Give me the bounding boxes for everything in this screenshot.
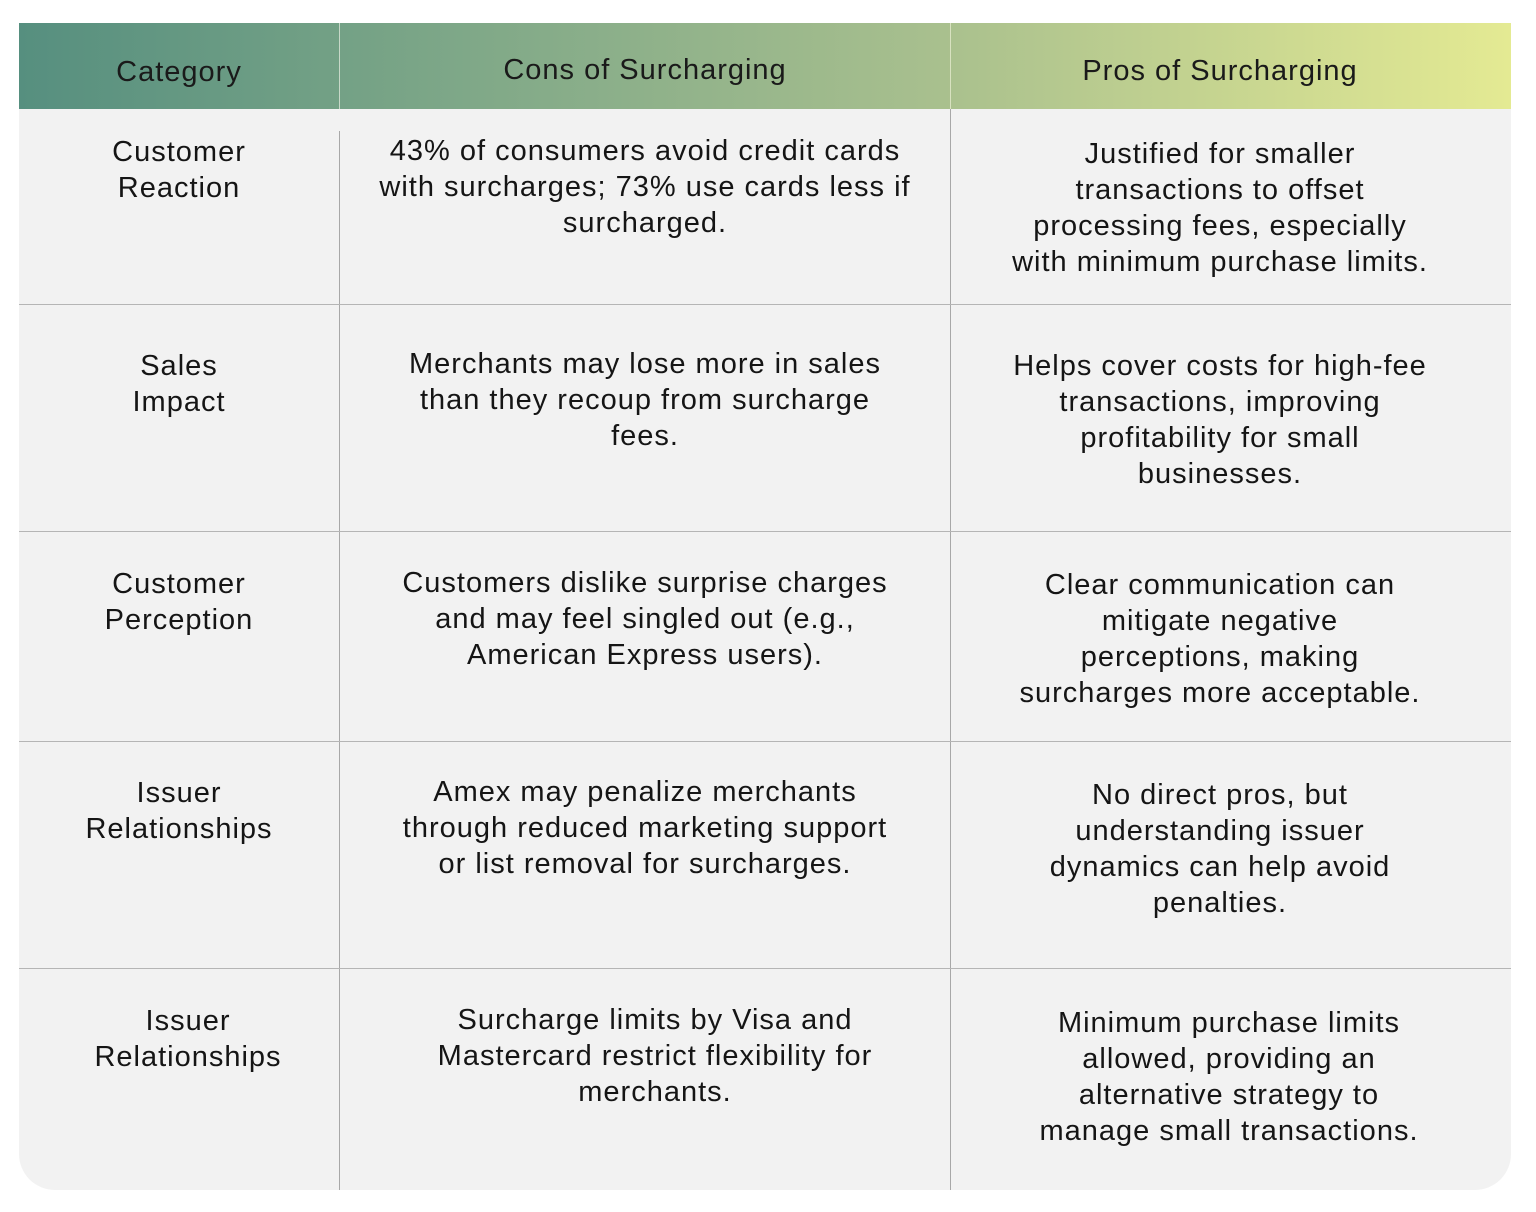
row4 cons: or list removal for surcharges. xyxy=(439,848,851,880)
row3 category: Customer xyxy=(112,568,246,600)
row5 category: Relationships xyxy=(94,1041,282,1073)
row1 category: Reaction xyxy=(118,172,240,204)
row3 cons: Customers dislike surprise charges xyxy=(402,567,888,599)
row4 pros: dynamics can help avoid xyxy=(1050,851,1390,883)
row4 pros: No direct pros, but xyxy=(1092,779,1348,811)
row1 pros: transactions to offset xyxy=(1075,174,1365,206)
row5 category: Issuer xyxy=(146,1005,230,1037)
row2 pros: Helps cover costs for high-fee xyxy=(1013,350,1427,382)
row3 pros: perceptions, making xyxy=(1081,641,1359,673)
row1 pros: Justified for smaller xyxy=(1085,138,1355,170)
row3 cons xyxy=(402,567,888,671)
row1 cons: 43% of consumers avoid credit cards xyxy=(390,135,900,167)
header bar xyxy=(19,23,1511,109)
row4 category: Relationships xyxy=(85,813,273,845)
row5 cons xyxy=(438,1004,872,1108)
row2 cons: fees. xyxy=(611,420,679,452)
row4 pros: penalties. xyxy=(1153,887,1287,919)
row1 cons: with surcharges; 73% use cards less if xyxy=(379,171,911,203)
row5 cons: Surcharge limits by Visa and xyxy=(458,1004,852,1036)
row1 category: Customer xyxy=(112,136,246,168)
row5 pros: manage small transactions. xyxy=(1040,1115,1418,1147)
header: Category: Category xyxy=(116,56,242,88)
row3 pros: surcharges more acceptable. xyxy=(1020,677,1420,709)
row3 category: Perception xyxy=(105,604,253,636)
row1 pros: processing fees, especially xyxy=(1033,210,1407,242)
row5 pros: allowed, providing an xyxy=(1082,1043,1376,1075)
row1 cons xyxy=(379,135,911,239)
row3 pros: mitigate negative xyxy=(1102,605,1338,637)
row5 cons: merchants. xyxy=(578,1076,732,1108)
row4 cons: Amex may penalize merchants xyxy=(433,776,857,808)
row4 cons: through reduced marketing support xyxy=(403,812,887,844)
row4 category: Issuer xyxy=(137,777,221,809)
row3 cons: and may feel singled out (e.g., xyxy=(435,603,855,635)
row5 category xyxy=(94,1005,282,1073)
row5 pros xyxy=(1040,1007,1418,1147)
row2 cons xyxy=(409,348,881,452)
row2 category: Sales xyxy=(140,350,218,382)
row5 cons: Mastercard restrict flexibility for xyxy=(438,1040,872,1072)
row3 cons: American Express users). xyxy=(467,639,823,671)
row2 category: Impact xyxy=(132,386,226,418)
row2 cons: than they recoup from surcharge xyxy=(420,384,870,416)
row2 pros: transactions, improving xyxy=(1059,386,1381,418)
row1 cons: surcharged. xyxy=(563,207,727,239)
row1 pros xyxy=(1012,138,1428,278)
row4 pros xyxy=(1050,779,1390,919)
row4 category xyxy=(85,777,273,845)
row1 pros: with minimum purchase limits. xyxy=(1012,246,1428,278)
row3 pros: Clear communication can xyxy=(1045,569,1395,601)
row2 cons: Merchants may lose more in sales xyxy=(409,348,881,380)
row3 category xyxy=(105,568,253,636)
row2 pros xyxy=(1013,350,1427,490)
row5 pros: alternative strategy to xyxy=(1079,1079,1379,1111)
row2 pros: profitability for small xyxy=(1080,422,1360,454)
row3 pros xyxy=(1020,569,1420,709)
row5 pros: Minimum purchase limits xyxy=(1058,1007,1400,1039)
header: Cons: Cons of Surcharging xyxy=(503,54,787,86)
header: Pros: Pros of Surcharging xyxy=(1082,55,1358,87)
row1 category xyxy=(112,136,246,204)
row4 cons xyxy=(403,776,887,880)
row2 pros: businesses. xyxy=(1138,458,1302,490)
row2 category xyxy=(132,350,226,418)
row4 pros: understanding issuer xyxy=(1075,815,1365,847)
